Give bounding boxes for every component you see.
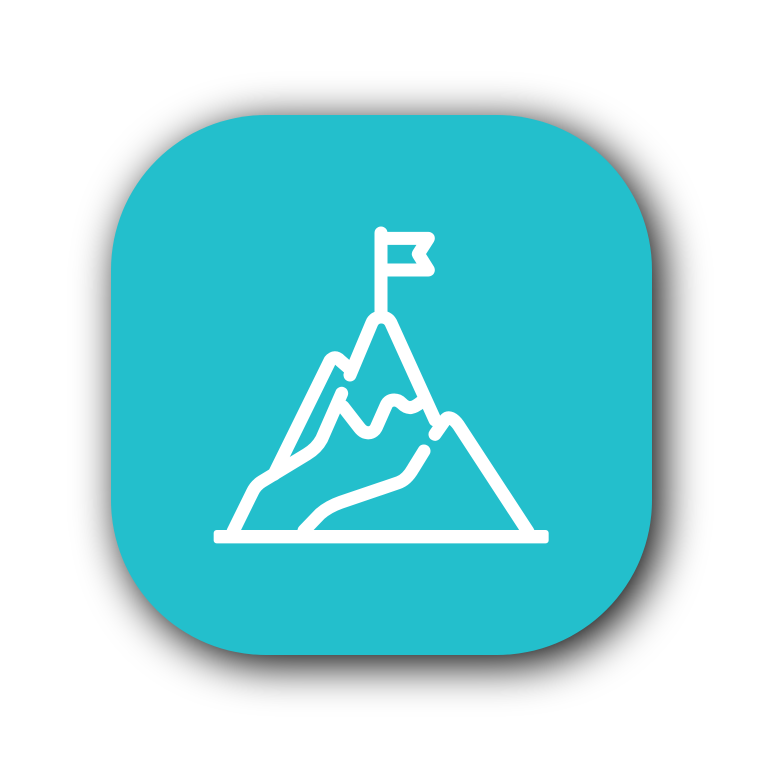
icon: main peak [350,317,435,420]
icon: lower path [304,451,424,531]
panel: rounded teal tile with shadow [111,115,652,655]
icon: flag and pole [381,233,428,317]
icon: left shoulder ridge [274,358,348,474]
icon: ground line [214,530,549,543]
icon: snow line [343,400,422,433]
icon: right peak [435,418,528,532]
icon: left slope [233,393,342,532]
